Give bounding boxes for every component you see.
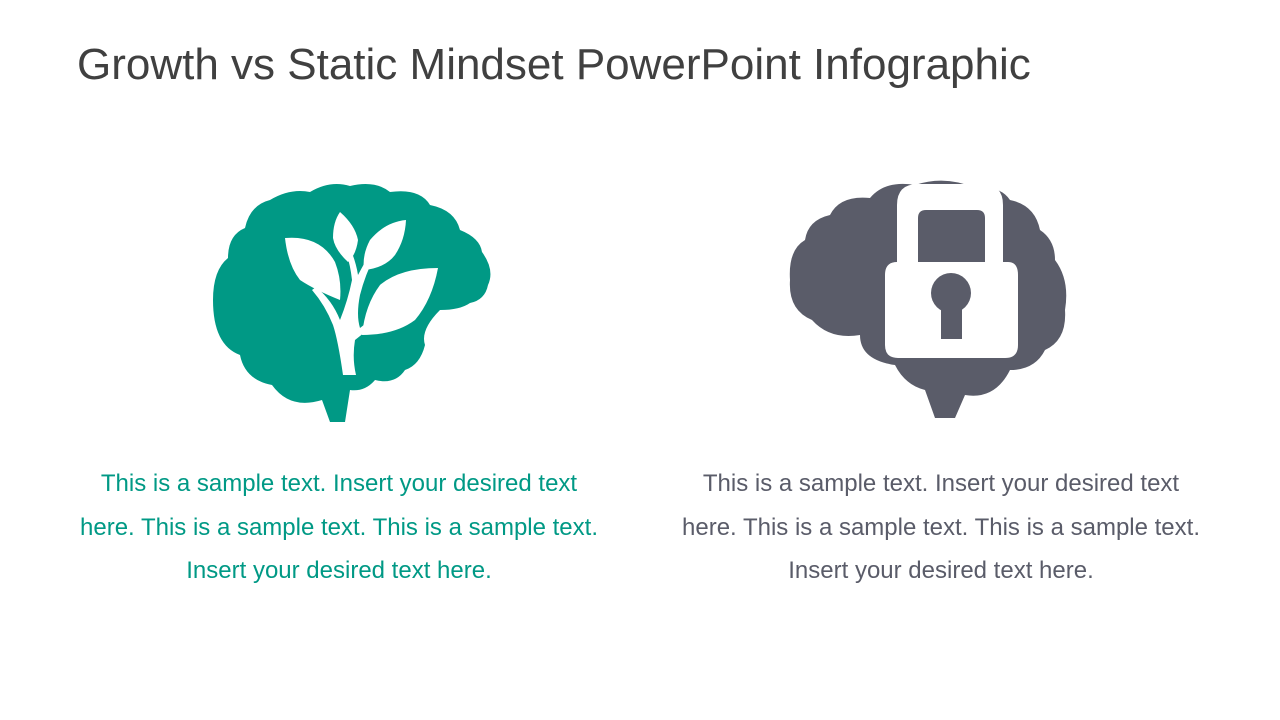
text block: static: This is a sample text. Insert your desired text — [703, 470, 1179, 497]
text block: static: here. This is a sample text. This is a sample text. — [682, 514, 1200, 540]
icon: growth brain with plant — [213, 184, 490, 422]
text block: growth — [80, 470, 598, 584]
icon: static brain with padlock — [790, 181, 1066, 418]
text block: growth: Insert your desired text here. — [186, 557, 492, 584]
text block: growth: here. This is a sample text. This is a sample text. — [80, 514, 598, 540]
text block: static — [682, 470, 1200, 584]
text block: static: Insert your desired text here. — [788, 557, 1094, 584]
text block: growth: This is a sample text. Insert your desired text — [101, 470, 577, 497]
title: Growth vs Static Mindset PowerPoint Infographic — [77, 40, 1031, 89]
